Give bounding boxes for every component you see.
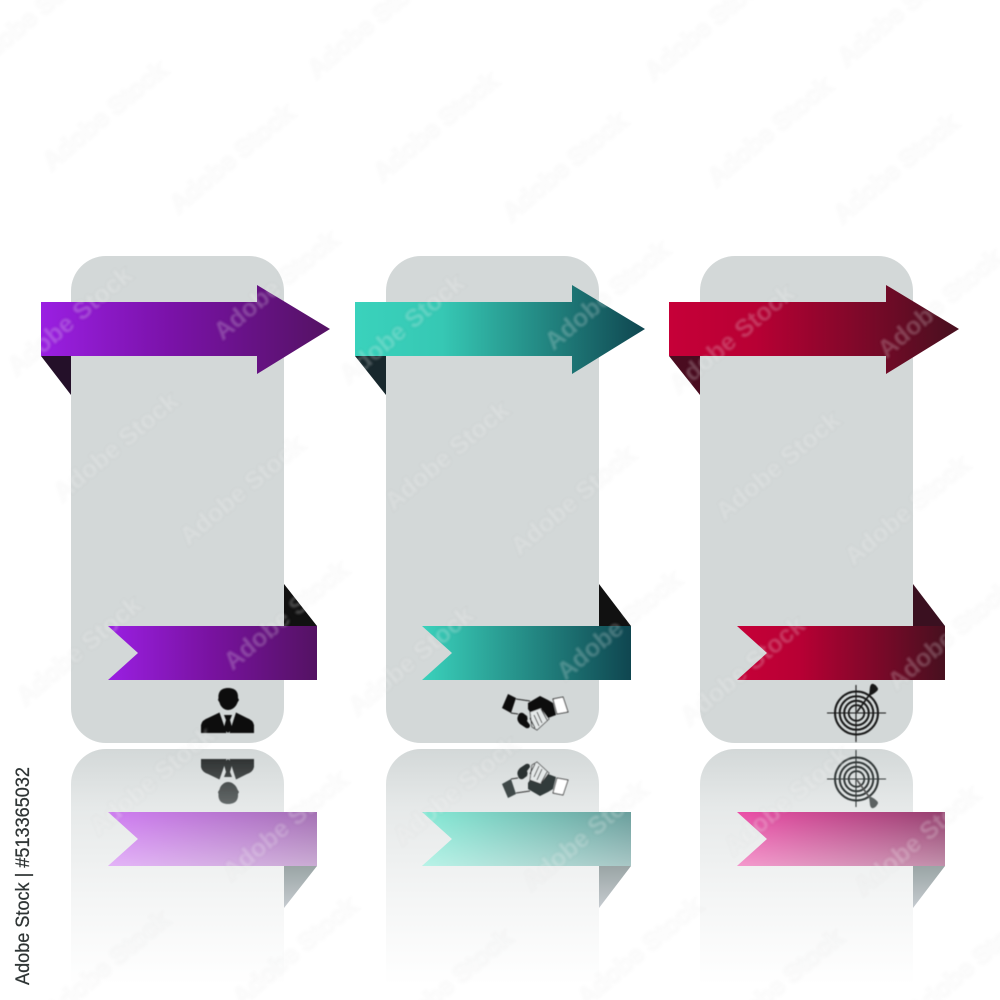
watermark pattern: Adobe Stock xyxy=(218,556,353,676)
watermark pattern: Adobe Stock xyxy=(505,441,640,561)
watermark pattern: Adobe Stock xyxy=(368,67,503,187)
watermark pattern: Adobe Stock xyxy=(11,591,146,711)
watermark pattern: Adobe Stock xyxy=(379,396,514,516)
watermark pattern: Adobe Stock xyxy=(517,776,652,896)
ribbon: teal reflection xyxy=(422,812,631,908)
watermark pattern: Adobe Stock xyxy=(37,56,172,176)
watermark pattern: Adobe Stock xyxy=(839,451,974,571)
ribbon: red bottom ribbon with fold xyxy=(737,584,945,680)
panel: card 1 reflection xyxy=(71,749,284,985)
watermark pattern: Adobe Stock xyxy=(828,109,963,229)
watermark pattern: Adobe Stock xyxy=(334,269,469,389)
watermark pattern: Adobe Stock xyxy=(343,601,478,721)
icon: target reflection xyxy=(827,750,886,808)
watermark pattern: Adobe Stock xyxy=(849,781,984,901)
watermark pattern: Adobe Stock xyxy=(497,107,632,227)
watermark pattern: Adobe Stock xyxy=(675,611,810,731)
icon: handshake xyxy=(502,694,568,730)
icon: target with dart xyxy=(827,684,886,742)
watermark pattern: Adobe Stock xyxy=(84,721,219,841)
panel: card 2 reflection xyxy=(386,749,599,985)
ribbon: teal bottom ribbon with fold xyxy=(422,584,631,680)
panel: card 1 xyxy=(71,256,284,743)
panel: card 2 xyxy=(386,256,599,743)
watermark pattern: Adobe Stock xyxy=(388,731,523,851)
arrow: purple top arrow with fold xyxy=(41,285,330,395)
stock id side text: Adobe Stock | #513365032 xyxy=(13,767,34,985)
panel: card 3 reflection xyxy=(700,749,913,985)
ribbon: purple bottom ribbon with fold xyxy=(108,584,317,680)
icon: businessman xyxy=(201,688,254,733)
ribbon: purple reflection xyxy=(108,812,317,908)
ribbon: red reflection xyxy=(737,812,945,908)
watermark pattern: Adobe Stock xyxy=(217,766,352,886)
watermark pattern: Adobe Stock xyxy=(664,279,799,399)
watermark pattern: Adobe Stock xyxy=(174,431,309,551)
panel: card 3 xyxy=(700,256,913,743)
watermark pattern: Adobe Stock xyxy=(2,261,137,381)
watermark pattern: Adobe Stock xyxy=(710,406,845,526)
icon: handshake reflection xyxy=(502,762,568,798)
icon: businessman reflection xyxy=(201,759,254,804)
watermark pattern: Adobe Stock xyxy=(539,236,674,356)
watermark pattern: Adobe Stock xyxy=(719,741,854,861)
watermark pattern: Adobe Stock xyxy=(164,99,299,219)
watermark pattern: Adobe Stock xyxy=(48,387,183,507)
watermark pattern: Adobe Stock xyxy=(551,566,686,686)
arrow: red top arrow with fold xyxy=(669,285,959,395)
watermark pattern: Adobe Stock xyxy=(208,226,343,346)
watermark pattern: Adobe Stock xyxy=(702,72,837,192)
arrow: teal top arrow with fold xyxy=(355,285,645,395)
